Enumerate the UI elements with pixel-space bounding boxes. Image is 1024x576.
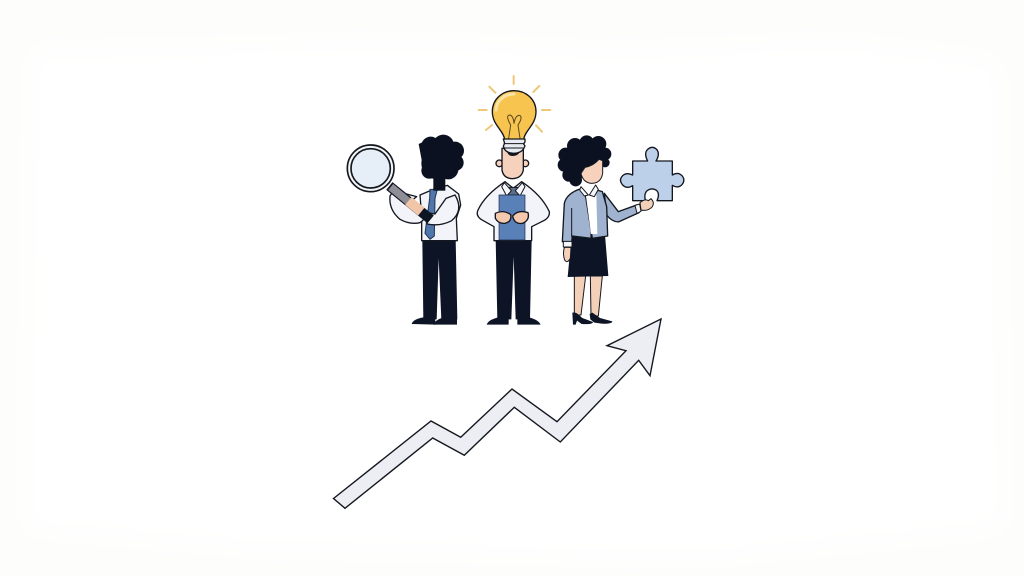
arm <box>390 191 459 225</box>
head: dark silhouette with curly hair <box>419 135 464 191</box>
extended arm and hand <box>604 193 641 222</box>
holding hand <box>640 199 653 210</box>
legs and shoes <box>412 240 457 325</box>
figure: man with magnifying glass <box>347 135 464 325</box>
shirt <box>420 185 461 241</box>
collar and tie <box>502 183 525 196</box>
icon: magnifying glass <box>347 145 431 219</box>
figure: woman with puzzle piece <box>558 135 684 325</box>
head <box>496 148 529 179</box>
hands <box>495 212 528 224</box>
figure: man with lightbulb and clipboard <box>477 76 550 325</box>
clipboard <box>499 195 525 240</box>
icon: lightbulb rays <box>479 76 550 132</box>
shirt <box>477 182 549 241</box>
jacket <box>562 189 608 242</box>
icon: lightbulb <box>492 91 536 153</box>
legs <box>574 276 602 316</box>
legs and shoes <box>487 239 541 325</box>
skirt <box>568 235 608 277</box>
tie <box>425 189 437 239</box>
shoes <box>572 312 612 325</box>
blouse <box>580 185 598 234</box>
head and curly hair <box>558 135 611 186</box>
arrow: rising growth arrow <box>334 319 661 508</box>
left hand and cuff <box>563 241 572 262</box>
icon: puzzle piece <box>620 147 684 201</box>
